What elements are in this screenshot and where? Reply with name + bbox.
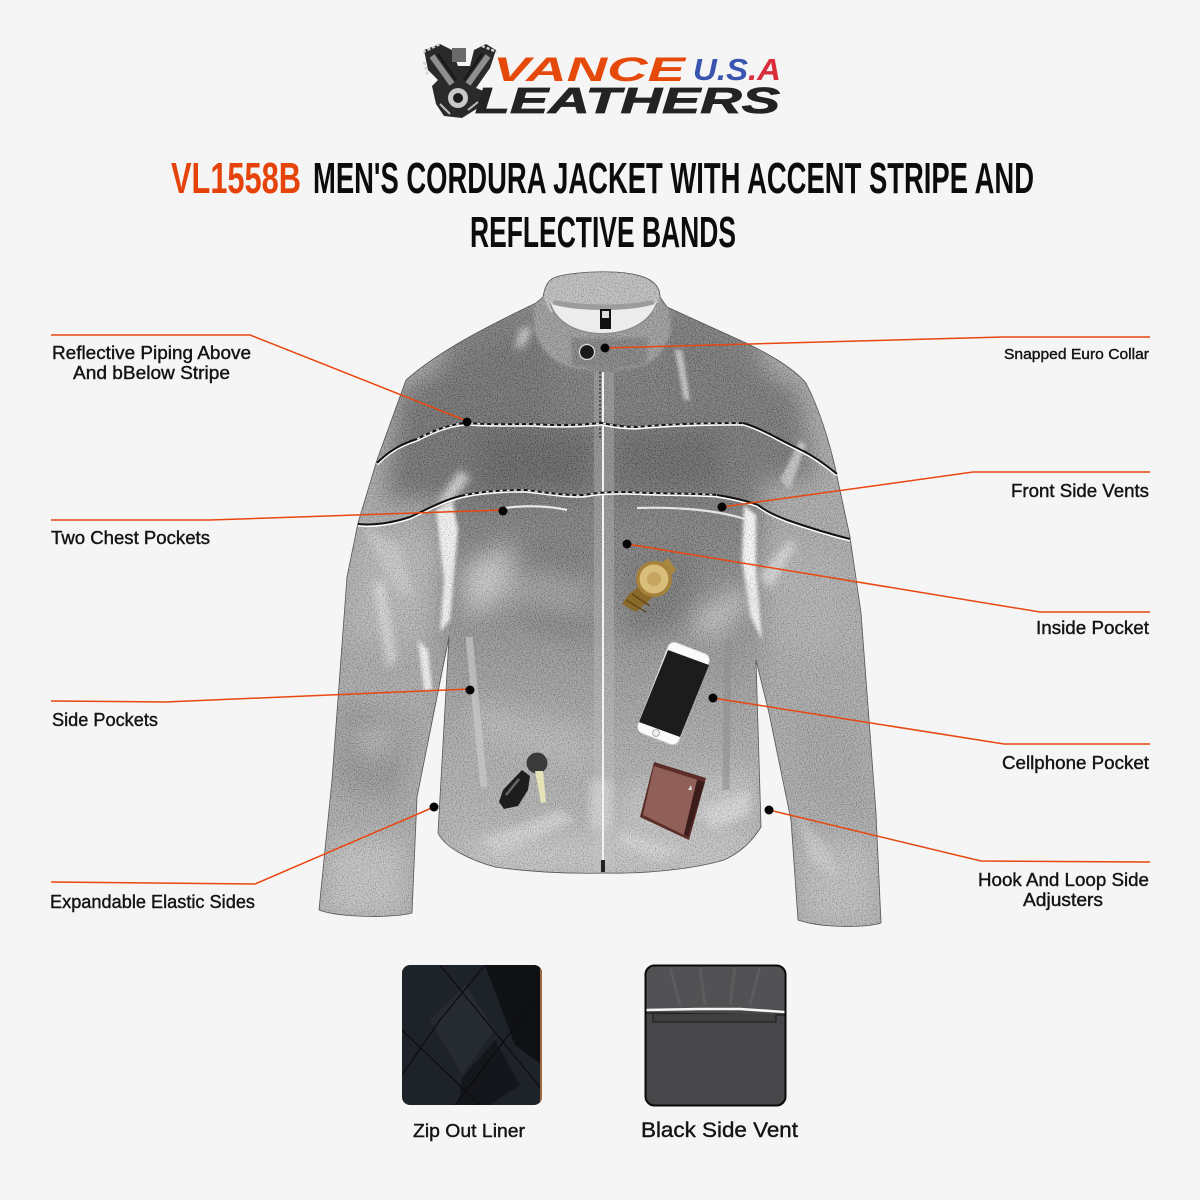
- marker: [498, 506, 508, 516]
- leader line: [51, 335, 467, 421]
- marker: [764, 806, 774, 814]
- leader line: [769, 810, 1150, 862]
- label: Expandable Elastic Sides: [50, 892, 255, 912]
- reflective piping stripes: [358, 423, 850, 540]
- label: Hook And Loop Side: [978, 870, 1149, 890]
- highlights and fabric folds: [352, 325, 840, 880]
- marker: [430, 802, 438, 812]
- size tag: [600, 309, 611, 329]
- label: Snapped Euro Collar: [1004, 346, 1149, 363]
- callout: side pockets: [51, 686, 474, 730]
- thumbnail: black side vent: [641, 965, 798, 1142]
- title: [171, 154, 1034, 257]
- leader line: [51, 510, 503, 520]
- logo word: Vance: VANCE: [493, 51, 687, 89]
- callout: front side vents: [718, 472, 1150, 512]
- brand logo: [423, 44, 781, 121]
- marker: [466, 686, 474, 694]
- zipper: [594, 372, 614, 872]
- label: Inside Pocket: [1036, 618, 1149, 638]
- collar band: [534, 272, 671, 370]
- thumbnail: zip out liner: [402, 965, 545, 1141]
- jacket outline: [319, 272, 881, 926]
- callout: snapped euro collar: [600, 337, 1150, 363]
- callout: hook and loop side adjusters: Adjusters: [1023, 890, 1103, 910]
- callout: cellphone pocket: [708, 694, 1150, 773]
- callout: two chest pockets: [51, 506, 508, 548]
- label: Front Side Vents: [1011, 481, 1149, 501]
- icon: gold watch: [622, 558, 676, 612]
- fabric grain: [320, 272, 880, 926]
- leader line: [627, 544, 1150, 612]
- marker: [708, 694, 718, 702]
- label: Two Chest Pockets: [51, 528, 210, 548]
- icon: car keys: [499, 747, 548, 809]
- logo word: Leathers: LEATHERS: [475, 80, 780, 121]
- quilted liner photo: [402, 965, 545, 1105]
- callout: reflective piping: [51, 335, 472, 426]
- marker: [718, 502, 726, 512]
- callout: reflective piping: And bBelow Stripe: [73, 363, 230, 383]
- collar lining: [550, 300, 657, 334]
- shading: [325, 320, 875, 925]
- collar snap: [580, 344, 594, 360]
- callout: inside pocket: [622, 540, 1150, 638]
- marker: [622, 540, 632, 548]
- pockets: [469, 506, 745, 790]
- label: Cellphone Pocket: [1002, 753, 1149, 773]
- title: second line: REFLECTIVE BANDS: [470, 208, 736, 257]
- leader line: [605, 337, 1150, 348]
- leader line: [51, 689, 470, 702]
- caption: Zip Out Liner: [413, 1121, 525, 1141]
- label: Side Pockets: [52, 710, 158, 730]
- icon: brown wallet: [640, 762, 706, 840]
- marker: [462, 418, 472, 426]
- caption: Black Side Vent: [641, 1119, 798, 1142]
- leader line: [51, 807, 434, 884]
- label: Reflective Piping Above: [52, 343, 251, 363]
- logo word: USA: U.S.A: [693, 52, 781, 87]
- marker: [600, 344, 610, 352]
- callout: hook and loop side adjusters: [764, 806, 1150, 910]
- side vent photo: [645, 965, 786, 1106]
- jacket illustration: [300, 260, 900, 940]
- leader line: [713, 698, 1150, 744]
- leader line: [722, 472, 1150, 507]
- callout: expandable elastic sides: [50, 802, 438, 912]
- title: product code: VL1558B: [171, 154, 301, 203]
- icon: smartphone: [636, 640, 711, 747]
- icon: engine: [423, 44, 497, 118]
